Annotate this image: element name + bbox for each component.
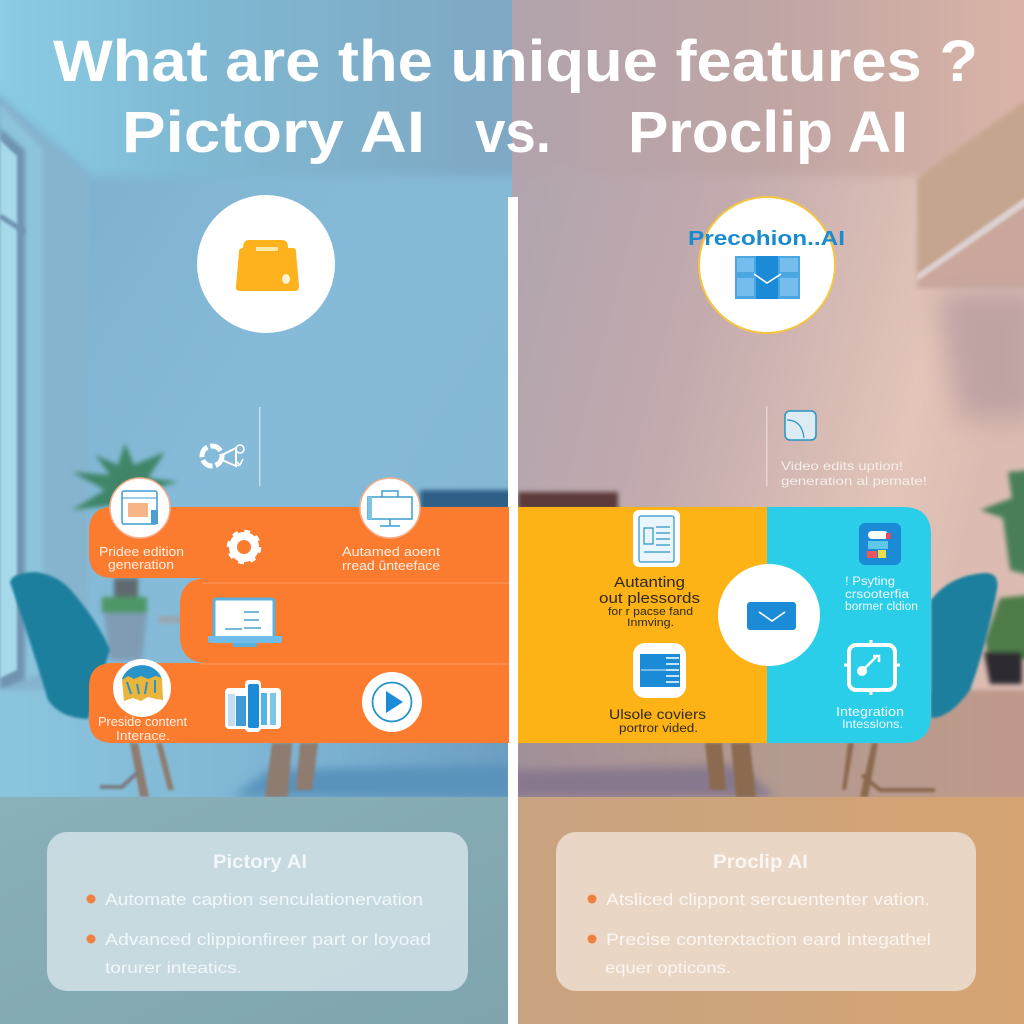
text: playing character [845, 576, 918, 613]
panel: Proclip AI yellow and cyan features [518, 507, 931, 743]
icon: integration node [844, 640, 900, 695]
text: autanting passwords: Inmving. [627, 617, 674, 629]
text: integration [836, 705, 904, 731]
text: playing character: crsooterfia [845, 589, 910, 601]
panel: Proclip AI summary: Atsliced clippont sercuententer vation. [606, 890, 930, 909]
panel: Proclip AI summary: equer opticons. [605, 960, 731, 977]
icon: colour app tile [859, 523, 901, 565]
left feature: speaker icon and rule [202, 407, 260, 486]
title: Proclip AI [628, 100, 908, 165]
background: right table top [512, 797, 1024, 1024]
center divider [508, 197, 518, 1024]
title: vs. [475, 100, 551, 165]
text: edition generation [99, 545, 184, 572]
icon: Proclip AI logo circle [688, 197, 845, 333]
icon: monitor with handle [360, 478, 420, 538]
panel: Pictory AI summary: Automate caption senculationervation [105, 890, 423, 909]
icon: laptop [208, 599, 282, 647]
text: integration: Intesslons. [842, 717, 903, 731]
text: edition generation: Pridee edition [99, 545, 184, 559]
text: precise content: Preside content [98, 715, 188, 729]
background: blue room left half [0, 0, 540, 810]
title: What are the unique features ? [53, 29, 978, 94]
text: precise content [98, 715, 188, 743]
text: ulsole covers [609, 706, 706, 735]
text: integration: Integration [836, 705, 904, 719]
background: left table top [0, 797, 512, 1024]
title [53, 29, 978, 165]
panel: Pictory AI summary [47, 832, 468, 991]
text: autanting passwords [599, 575, 700, 629]
right feature: video caption note: Video edits uption! [781, 459, 903, 473]
text: automated agent: Autamed aoent [342, 545, 441, 559]
panel: Proclip AI summary: Proclip AI [713, 852, 808, 873]
panel: Pictory AI summary: Pictory AI [213, 852, 307, 873]
text: autanting passwords: Autanting [614, 575, 685, 591]
icon: gear [229, 532, 259, 562]
icon: Pictory AI logo bag [197, 195, 335, 333]
icon: Proclip AI logo circle: Precohion..AI [688, 228, 845, 250]
icon: play button [362, 672, 422, 732]
text: automated agent [342, 545, 441, 573]
icon: books [225, 680, 281, 732]
text: precise content: Interace. [116, 729, 170, 743]
panel: Proclip AI summary [556, 832, 976, 991]
text: edition generation: generation [108, 558, 174, 572]
text: autanting passwords: for r pacse fand [608, 606, 693, 618]
text: automated agent: rread ûnteeface [342, 559, 440, 573]
title: Pictory AI [122, 100, 425, 165]
right feature: video caption note [766, 406, 927, 488]
icon: layout [633, 643, 686, 698]
panel: Pictory AI summary: Advanced clippionfireer part or loyoad [105, 930, 431, 949]
text: playing character: ! Psyting [845, 576, 895, 588]
text: ulsole covers: Ulsole coviers [609, 706, 706, 722]
icon: edition window [110, 478, 170, 538]
text: playing character: bormer cldion [845, 601, 918, 613]
panel: Proclip AI summary: Precise conterxtaction eard integathel [606, 930, 931, 949]
text: autanting passwords: out plessords [599, 591, 700, 607]
panel: Pictory AI orange features [89, 478, 509, 743]
icon: content map [113, 659, 171, 717]
icon: central mail [718, 564, 820, 666]
right feature: video caption note: generation al pemate! [781, 474, 927, 488]
text: ulsole covers: portror vided. [619, 723, 698, 735]
panel: Pictory AI summary: torurer inteatics. [105, 960, 242, 977]
icon: document [633, 510, 680, 567]
background: pink room right half [492, 0, 1024, 810]
